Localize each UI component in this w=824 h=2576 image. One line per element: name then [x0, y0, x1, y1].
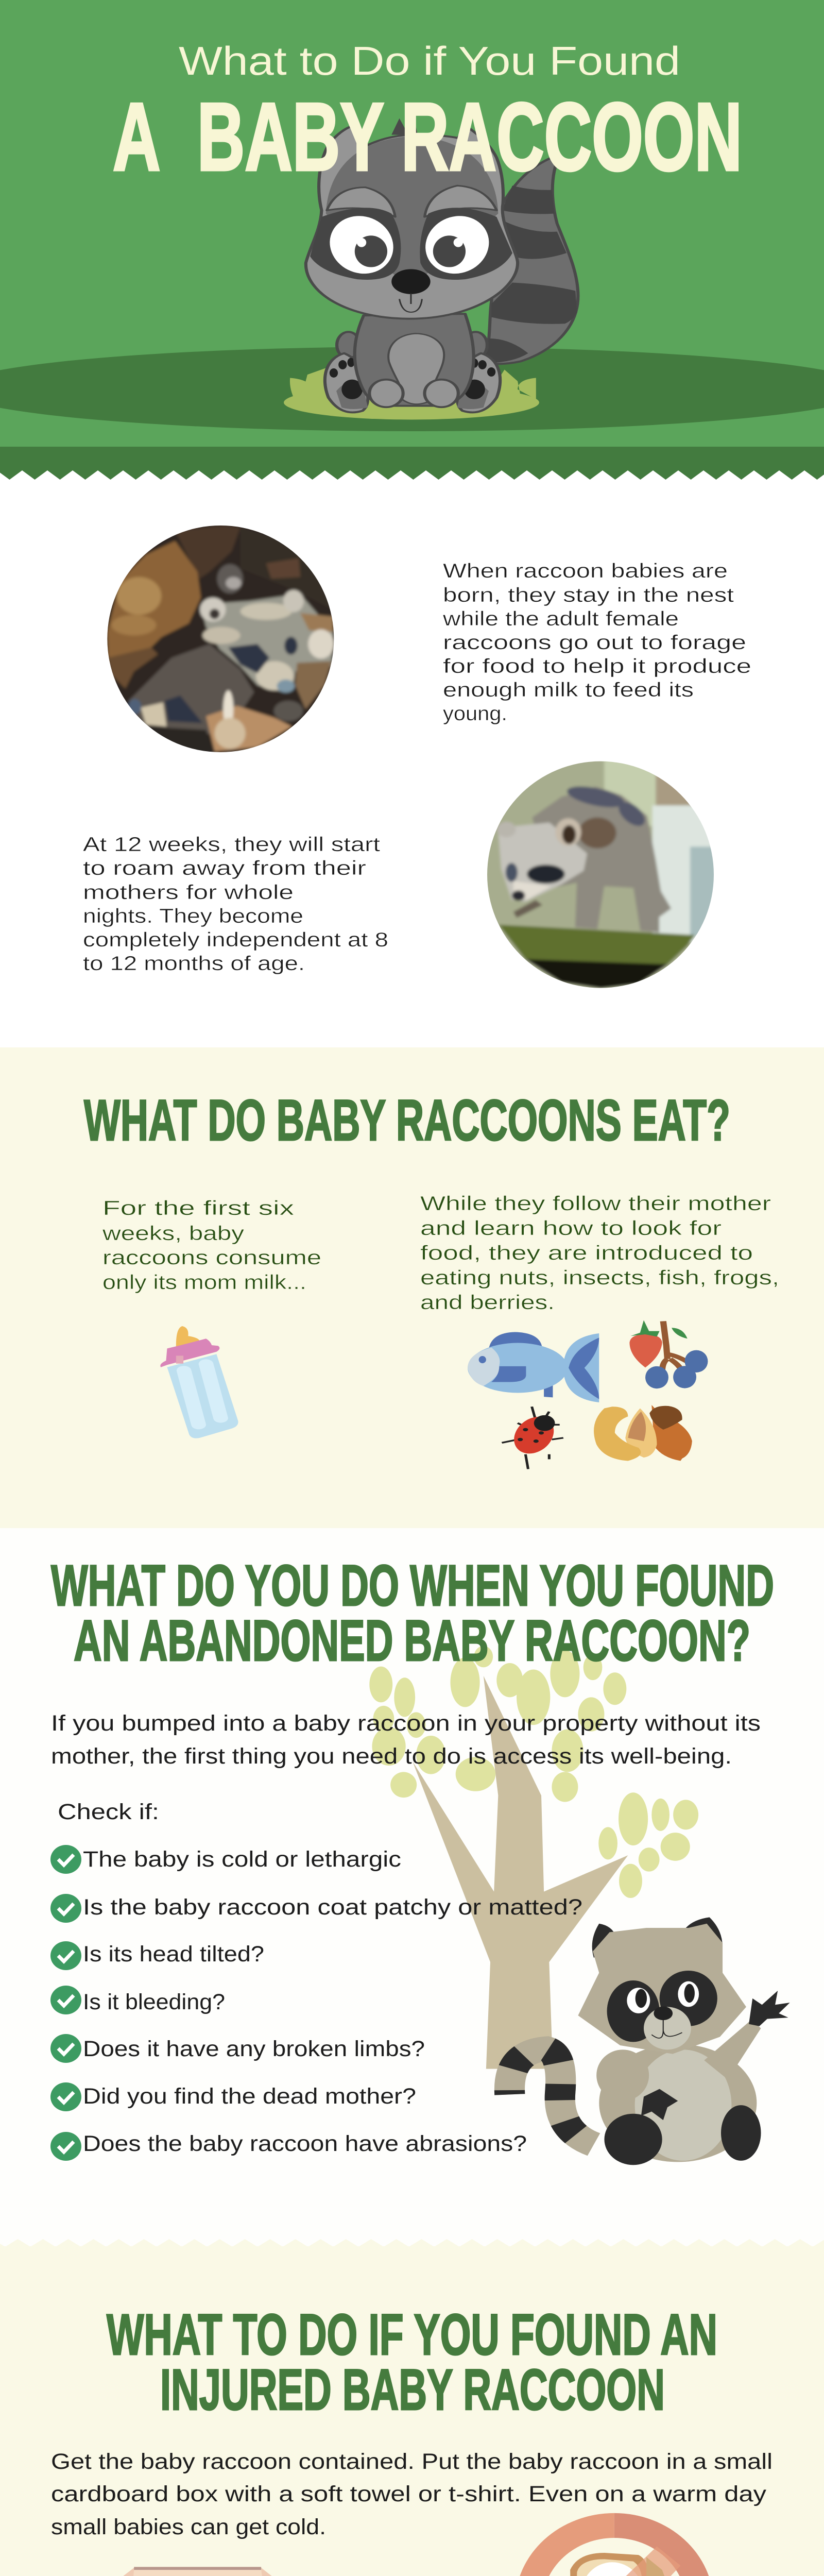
text: 12 weeks: [83, 834, 388, 975]
ground ellipse: [0, 347, 824, 431]
text: first six weeks: weeks, baby: [102, 1223, 245, 1245]
photo: baby raccoons in a tree hollow: [103, 520, 340, 757]
panel: abandoned baby raccoon: [50, 1553, 790, 2165]
check item: coat patchy: Is the baby raccoon coat patchy or matted?: [83, 1895, 582, 1920]
text: following mother: and learn how to look for: [420, 1217, 722, 1240]
text: bumped into a baby raccoon: If you bumped into a baby raccoon in your property without its: [51, 1711, 761, 1736]
subtitle: What to Do if You Found: [179, 38, 680, 83]
text: get the baby raccoon contained: cardboard box with a soft towel or t-shirt. Even on a warm day: [51, 2482, 767, 2506]
header panel: [0, 0, 824, 1047]
check item: cold or lethargic: The baby is cold or lethargic: [83, 1847, 401, 1872]
icon: cardboard box: [89, 2567, 305, 2576]
checklist: [50, 1845, 582, 2161]
text: get the baby raccoon contained: Get the baby raccoon contained. Put the baby raccoon in a small: [51, 2449, 772, 2474]
panel: injured baby raccoon: [0, 2239, 824, 2576]
text: first six weeks: raccoons consume: [102, 1247, 321, 1269]
text: following mother: and berries.: [420, 1292, 555, 1314]
text: following mother: While they follow their mother: [420, 1193, 771, 1215]
check item: bleeding: [50, 1986, 225, 2014]
illustration: tree with leaves: [369, 1646, 698, 2069]
text: check if: Check if:: [58, 1800, 159, 1824]
text: raccoon babies nest: born, they stay in the nest: [443, 584, 734, 606]
text: 12 weeks: mothers for whole: [83, 882, 294, 904]
text: 12 weeks: to 12 months of age.: [83, 953, 305, 975]
text: raccoon babies nest: When raccoon babies are: [443, 560, 728, 582]
illustration: cartoon raccoon: [284, 118, 578, 419]
check item: dead mother: [50, 2082, 416, 2111]
check item: head tilted: [50, 1941, 264, 1970]
photo: raccoon on a ledge: [484, 757, 721, 994]
text: raccoon babies nest: enough milk to feed its: [443, 679, 694, 701]
icon: baby bottle: [160, 1326, 238, 1438]
heading: abandoned baby raccoon: [51, 1553, 774, 1673]
panel: what do baby raccoons eat: [0, 1047, 824, 1528]
check item: bleeding: Is it bleeding?: [83, 1990, 225, 2014]
text: bumped into a baby raccoon: mother, the first thing you need to do is access its well-being.: [51, 1744, 732, 1769]
text: bumped into a baby raccoon: [51, 1711, 761, 1769]
text: 12 weeks: completely independent at 8: [83, 929, 388, 951]
text: 12 weeks: to roam away from their: [83, 857, 366, 879]
text: first six weeks: [102, 1197, 321, 1294]
illustration: waving raccoon: [509, 1917, 790, 2165]
text: first six weeks: only its mom milk...: [102, 1272, 306, 1294]
icon: strawberry and blueberries: [629, 1320, 708, 1388]
icon: nuts: [594, 1405, 692, 1461]
text: raccoon babies nest: raccoons go out to forage: [443, 632, 746, 654]
text: following mother: food, they are introduced to: [420, 1242, 753, 1264]
check item: abrasions: Does the baby raccoon have abrasions?: [83, 2131, 527, 2156]
check item: cold or lethargic: [50, 1845, 401, 1874]
text: raccoon babies nest: young.: [443, 703, 507, 725]
text: following mother: [420, 1193, 779, 1314]
icon: ladybug: [502, 1406, 563, 1469]
text: get the baby raccoon contained: small babies can get cold.: [51, 2515, 326, 2539]
panel: raccoon babies intro: [83, 520, 751, 994]
check item: coat patchy: [50, 1894, 582, 1923]
heading: injured baby raccoon: [107, 2302, 717, 2422]
text: raccoon babies nest: [442, 560, 751, 725]
text: get the baby raccoon contained: [51, 2449, 772, 2539]
text: following mother: eating nuts, insects, fish, frogs,: [420, 1267, 779, 1289]
text: first six weeks: For the first six: [102, 1197, 295, 1219]
icon: no food sign: [515, 2513, 714, 2576]
icon: fish: [468, 1332, 599, 1402]
check item: head tilted: Is its head tilted?: [83, 1942, 264, 1967]
text: raccoon babies nest: for food to help it produce: [443, 655, 751, 677]
text: raccoon babies nest: while the adult female: [442, 608, 679, 630]
text: 12 weeks: At 12 weeks, they will start: [83, 834, 380, 856]
check item: dead mother: Did you find the dead mother?: [83, 2084, 416, 2109]
text: 12 weeks: nights. They become: [83, 905, 303, 927]
check item: broken limbs: Does it have any broken limbs?: [83, 2037, 425, 2061]
